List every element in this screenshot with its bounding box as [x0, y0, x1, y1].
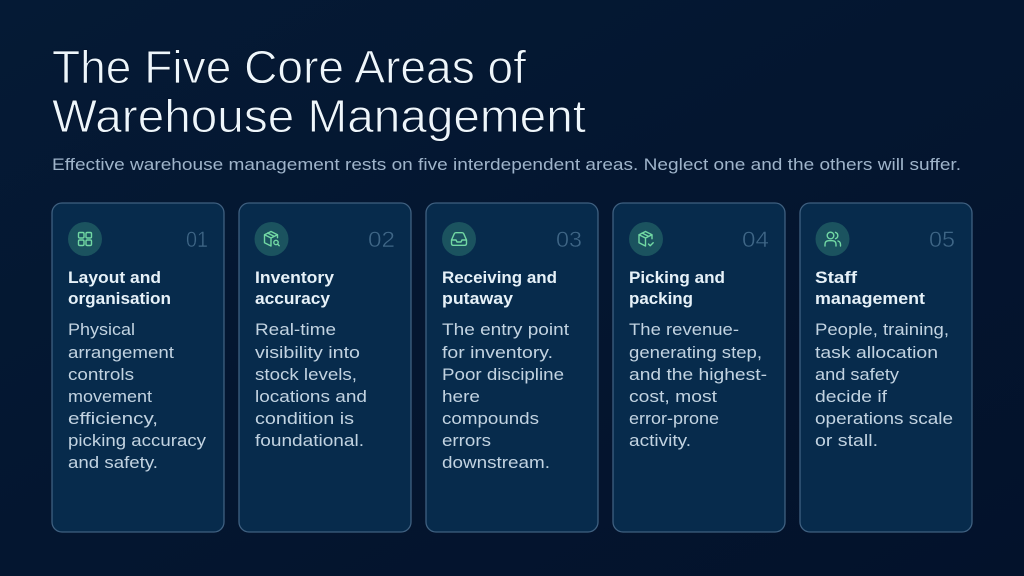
body text: cost, most — [629, 387, 717, 406]
body text: picking accuracy — [68, 431, 207, 450]
title: The Five Core Areas of — [52, 41, 526, 93]
body text: The entry point — [442, 320, 569, 339]
body text: foundational. — [255, 431, 364, 450]
body text: Real-time — [255, 320, 336, 339]
title — [52, 41, 586, 142]
icon: layout grid — [68, 222, 102, 256]
heading: Picking and — [629, 268, 725, 287]
body text: movement — [68, 387, 152, 406]
heading: packing — [629, 289, 693, 308]
icon: box with check — [629, 222, 663, 256]
heading: accuracy — [255, 289, 331, 308]
panel: inventory accuracy — [239, 203, 411, 532]
heading — [68, 268, 171, 308]
body text: condition is — [255, 409, 354, 428]
heading: organisation — [68, 289, 171, 308]
body text: and the highest- — [629, 365, 767, 384]
body text: Physical — [68, 320, 135, 339]
body text: The revenue- — [629, 320, 739, 339]
body text: visibility into — [255, 343, 360, 362]
body text: decide if — [815, 387, 887, 406]
number 02: 02 — [368, 227, 395, 252]
body text: controls — [68, 365, 134, 384]
heading — [442, 268, 557, 308]
number 05: 05 — [929, 227, 955, 252]
panel: receiving and putaway — [426, 203, 598, 532]
body text: operations scale — [815, 409, 953, 428]
body text: for inventory. — [442, 343, 553, 362]
panel: picking and packing — [613, 203, 785, 532]
body text — [815, 320, 953, 450]
heading: Receiving and — [442, 268, 557, 287]
body text: here — [442, 387, 480, 406]
heading: Staff — [815, 268, 857, 287]
body text: Poor discipline — [442, 365, 564, 384]
body text: and safety. — [68, 453, 158, 472]
subtitle: Effective warehouse management rests on five interdependent areas. Neglect one and the others will suffer. — [52, 155, 961, 174]
body text: efficiency, — [68, 409, 158, 428]
body text: generating step, — [629, 343, 762, 362]
body text: task allocation — [815, 343, 938, 362]
heading — [629, 268, 725, 308]
body text: errors — [442, 431, 491, 450]
panel: staff management — [800, 203, 972, 532]
body text: or stall. — [815, 431, 878, 450]
body text — [255, 320, 367, 450]
number 03: 03 — [556, 227, 582, 252]
number 01: 01 — [186, 227, 208, 252]
body text: error-prone — [629, 409, 719, 428]
icon: people — [816, 222, 850, 256]
body text: arrangement — [68, 343, 174, 362]
heading: putaway — [442, 289, 514, 308]
body text: and safety — [815, 365, 900, 384]
heading: Layout and — [68, 268, 161, 287]
icon: box with magnifier — [254, 222, 288, 256]
panel: layout and organisation — [52, 203, 224, 532]
body text — [629, 320, 767, 450]
body text — [68, 320, 207, 472]
body text — [442, 320, 569, 472]
body text: People, training, — [815, 320, 949, 339]
title: Warehouse Management — [52, 90, 586, 142]
body text: compounds — [442, 409, 539, 428]
body text: stock levels, — [255, 365, 357, 384]
heading: management — [815, 289, 925, 308]
heading — [255, 268, 335, 308]
body text: downstream. — [442, 453, 550, 472]
heading: Inventory — [255, 268, 335, 287]
body text: locations and — [255, 387, 367, 406]
number 04: 04 — [742, 227, 769, 252]
body text: activity. — [629, 431, 691, 450]
heading — [815, 268, 925, 308]
icon: inbox tray — [442, 222, 476, 256]
